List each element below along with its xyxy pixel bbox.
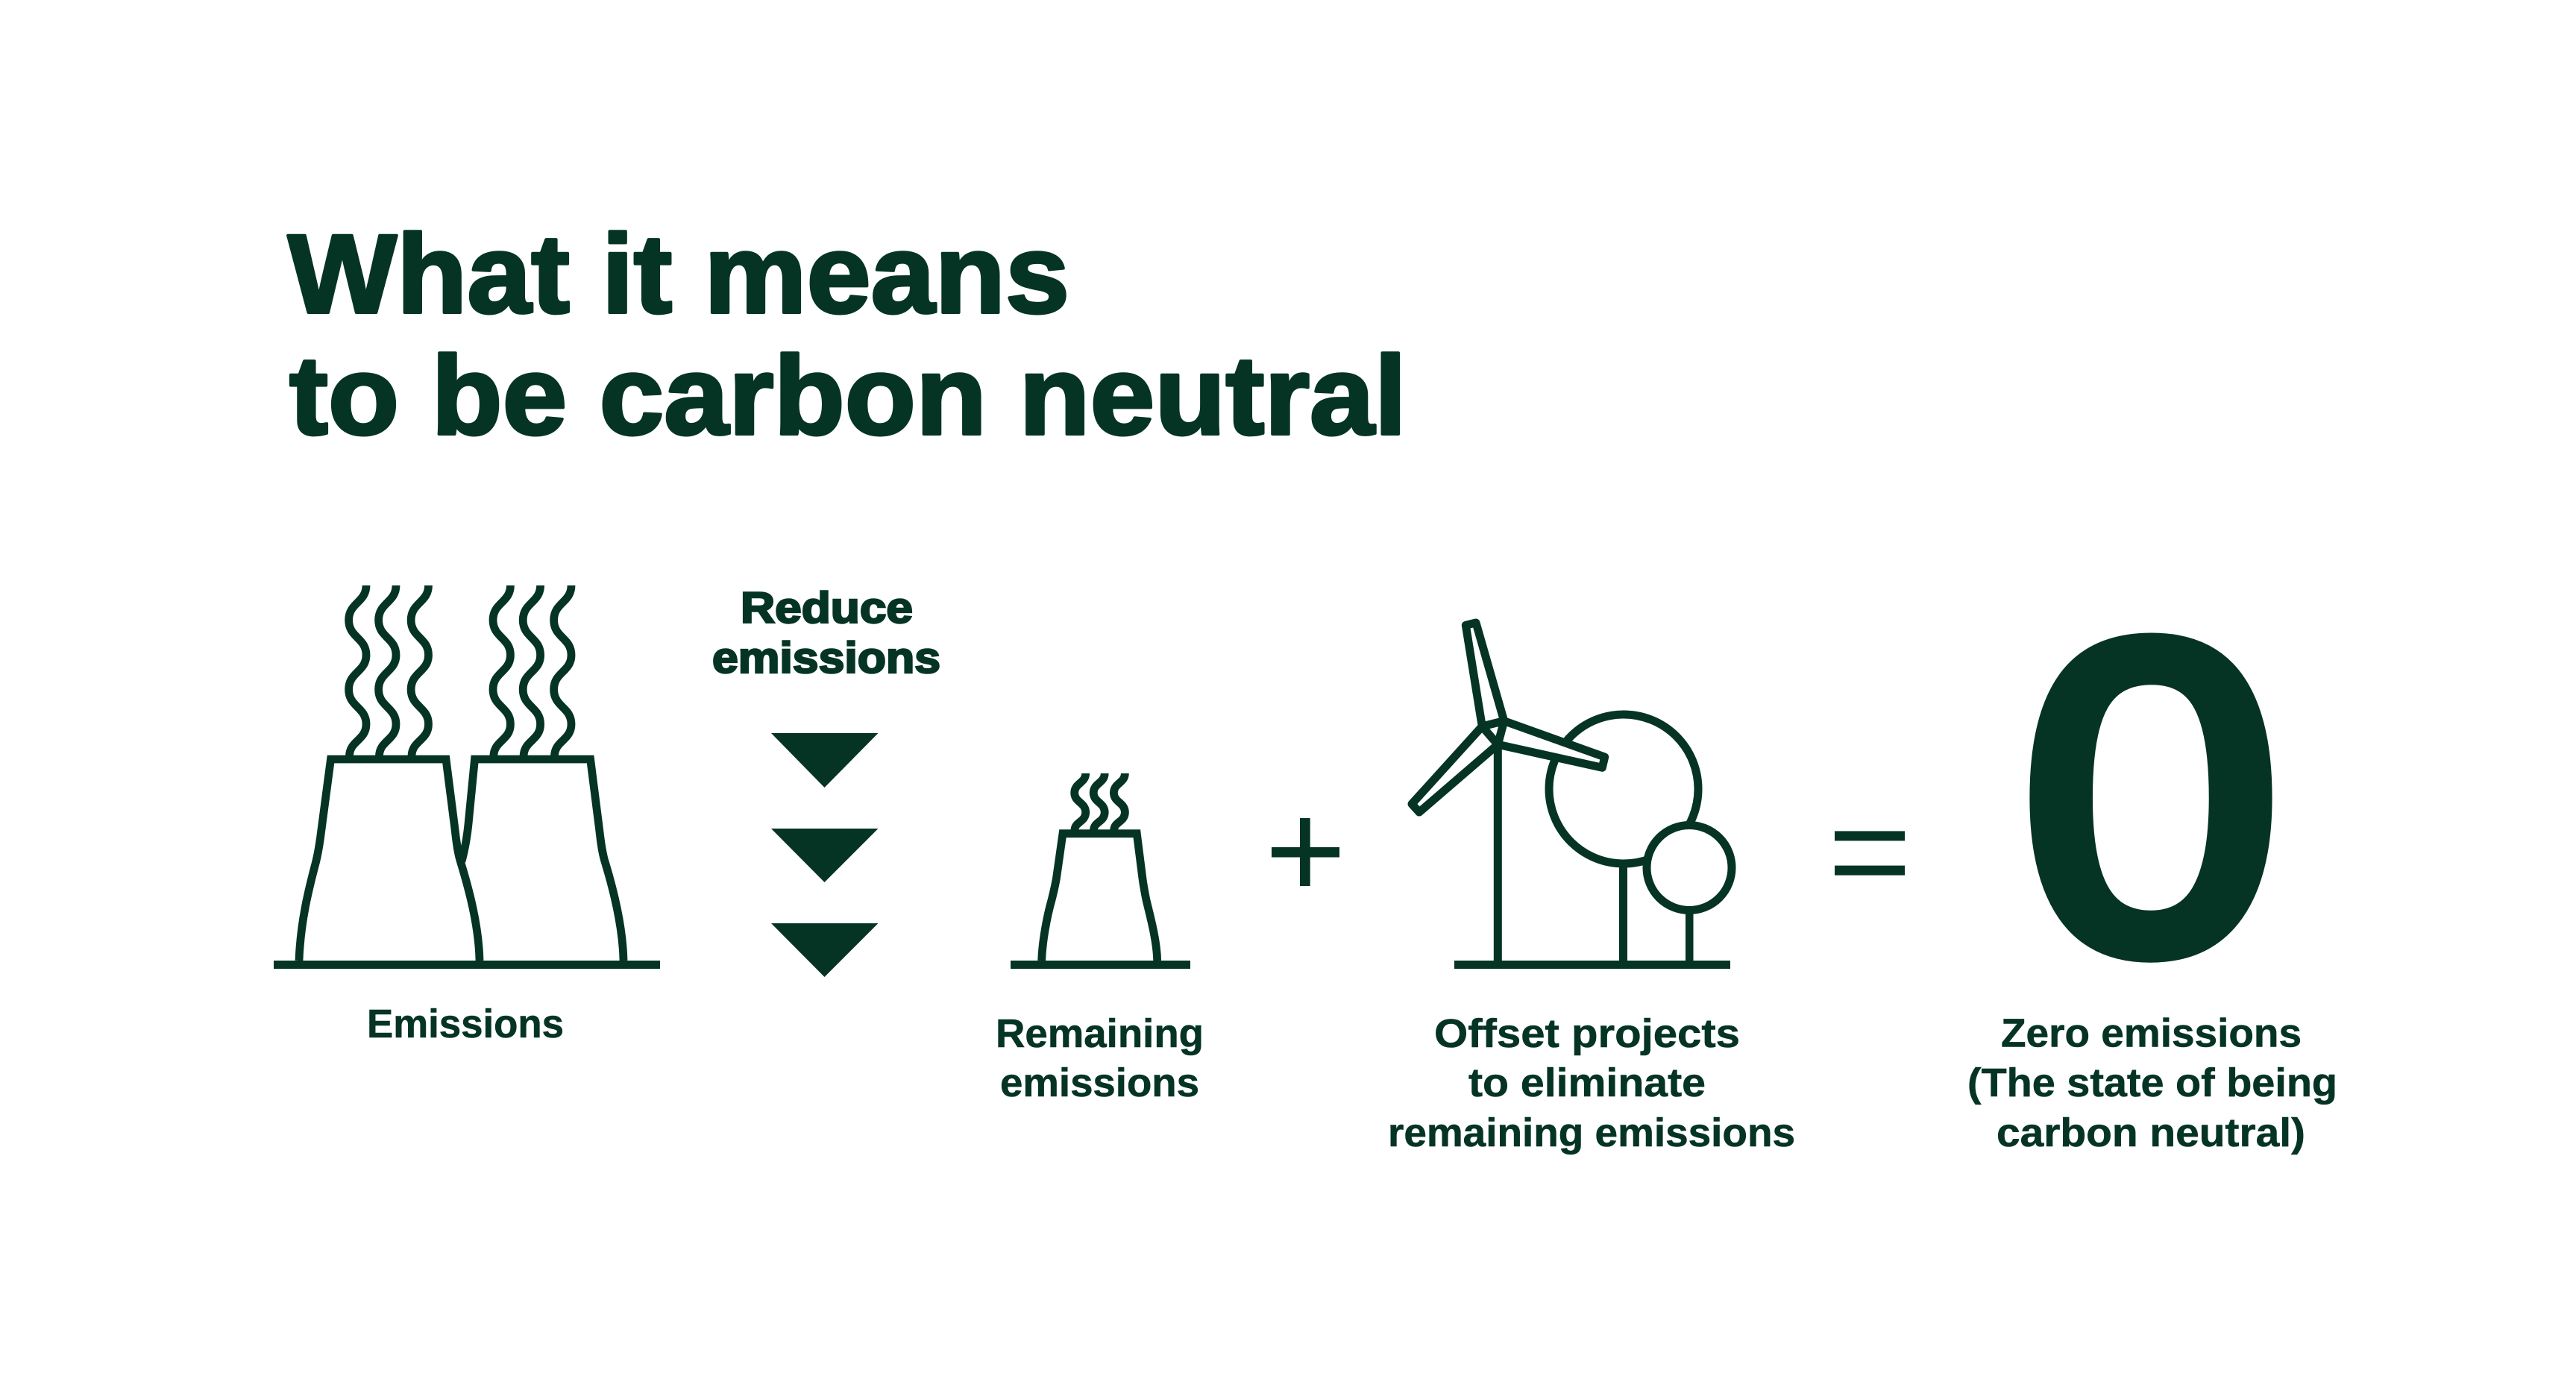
heading: reduce emissions: emissions (712, 634, 940, 682)
label: zero emissions: carbon neutral) (1997, 1110, 2305, 1155)
turbine tower (1494, 744, 1502, 962)
arrows: three downward triangles (771, 733, 879, 977)
icon: equals sign (1835, 831, 1905, 876)
ground line (274, 961, 660, 969)
heading: reduce emissions: Reduce (741, 584, 913, 632)
icon: two cooling towers with smoke (emissions) (274, 585, 660, 969)
label: zero emissions: (The state of being (1967, 1061, 2337, 1105)
label: offset projects: Offset projects (1434, 1011, 1740, 1056)
ground line (1454, 961, 1730, 969)
left cooling tower (299, 759, 480, 961)
smoke from right tower (493, 585, 571, 756)
icon: wind turbine and trees (offset projects) (1412, 623, 1732, 969)
icon: plus sign (1272, 818, 1339, 886)
icon: single small cooling tower (remaining emissions) (1011, 773, 1190, 969)
title (288, 211, 1407, 458)
label: zero emissions: Zero emissions (2001, 1011, 2302, 1056)
heading: reduce emissions (712, 584, 940, 682)
big number zero: 0 (2023, 553, 2279, 1040)
label: offset projects: to eliminate (1468, 1061, 1706, 1105)
smoke (1075, 773, 1125, 830)
title: to be carbon neutral (289, 333, 1407, 458)
label: zero emissions (1967, 1011, 2337, 1155)
turbine blades (1412, 623, 1605, 812)
smoke from left tower (349, 585, 428, 756)
label: emissions: Emissions (367, 1002, 564, 1046)
title: What it means (288, 211, 1069, 336)
small tree (1647, 825, 1732, 962)
ground line (1011, 961, 1190, 969)
label: remaining emissions (996, 1011, 1204, 1105)
label: offset projects: remaining emissions (1388, 1110, 1795, 1155)
label: remaining emissions: emissions (1000, 1061, 1199, 1105)
label: remaining emissions: Remaining (996, 1011, 1204, 1056)
tower (1042, 834, 1157, 961)
label: offset projects (1388, 1011, 1795, 1155)
right cooling tower (462, 759, 623, 961)
big tree (1549, 714, 1698, 962)
